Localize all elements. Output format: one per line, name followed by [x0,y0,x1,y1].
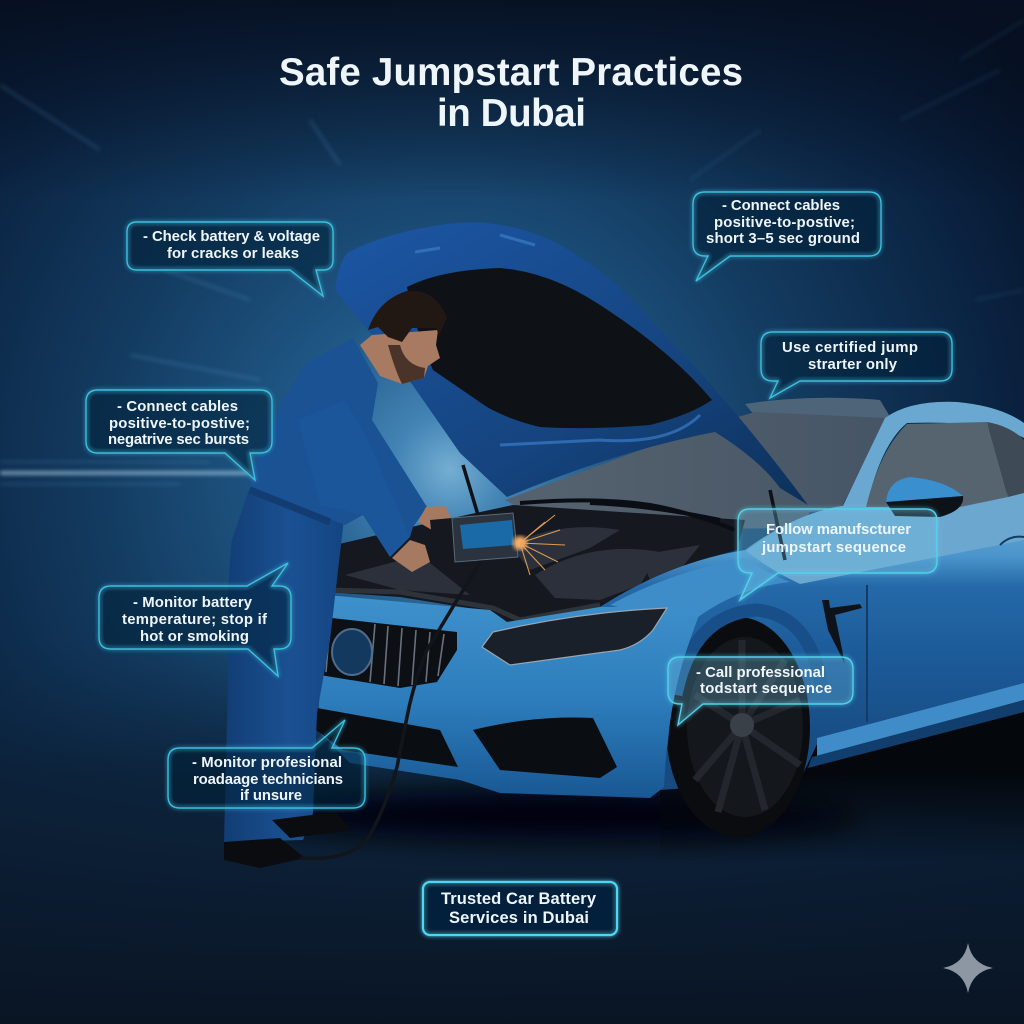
callout: certified jump starter: strarter only [808,357,898,373]
side windows [866,422,1024,507]
callout: connect cables top right: short 3–5 sec ground [706,231,860,247]
callout: connect cables left: positive-to-postive; [109,416,250,432]
body side [650,493,1024,790]
callout: connect cables top right: - Connect cables [722,198,840,214]
title: Safe Jumpstart Practices [279,51,743,94]
callout: check battery [127,222,333,296]
callout: monitor temperature: hot or smoking [140,629,249,645]
side mirror [886,477,963,517]
sleeve shading [298,400,410,557]
lower grilles [316,708,458,767]
car [316,398,1024,837]
sparks [513,515,565,575]
shoes [224,812,352,868]
lower side sill [808,683,1024,768]
callout: monitor temperature [99,563,291,676]
callout: check battery: - Check battery & voltage [143,229,320,245]
front bumper [317,595,700,798]
callout: connect cables top right: positive-to-postive; [714,215,855,231]
callout: monitor temperature: - Monitor battery [133,595,253,611]
callout: call professional: todstart sequence [700,681,832,697]
mechanic [224,291,452,868]
cable [300,557,483,859]
callout: professional technicians [168,720,365,808]
callout: manufacturer sequence [738,509,937,600]
callout: call professional [668,657,853,725]
callout: professional technicians: - Monitor profesional [192,755,342,771]
grille [320,617,457,688]
car roof and windshield [505,398,892,530]
callout: manufacturer sequence: jumpstart sequence [761,540,906,556]
callout: connect cables left [86,390,272,480]
footer badge [423,882,617,935]
icon: sparkle watermark [943,943,993,993]
callout: connect cables left: negatrive sec bursts [108,432,249,448]
callout: manufacturer sequence: Follow manufscturer [766,522,911,538]
footer badge: Trusted Car Battery [441,890,597,908]
diagnostic device [430,513,518,562]
title: in Dubai [437,92,586,135]
engine bay [327,500,745,622]
footer badge: Services in Dubai [449,909,589,927]
callout: connect cables left: - Connect cables [117,399,238,415]
roof pillar [840,402,1024,512]
callout: check battery: for cracks or leaks [167,246,299,262]
callout: professional technicians: roadaage technicians [193,772,343,788]
open hood [335,222,808,560]
waist belt [250,490,330,522]
side vent [822,600,862,664]
callout: certified jump starter: Use certified jump [782,340,918,356]
callout: connect cables top right [693,192,881,281]
wheel [666,617,810,837]
callout: monitor temperature: temperature; stop if [122,612,267,628]
callout: certified jump starter [761,332,952,398]
headlight [482,608,667,665]
head [360,291,447,384]
callout: professional technicians: if unsure [240,788,302,804]
fender [600,550,867,790]
torso and arm [250,338,427,557]
title [279,51,743,135]
door shoulder highlight [745,493,1024,584]
legs [224,487,345,842]
hands [392,506,452,572]
door seam and handle [867,537,1024,722]
callout: call professional: - Call professional [696,665,825,681]
